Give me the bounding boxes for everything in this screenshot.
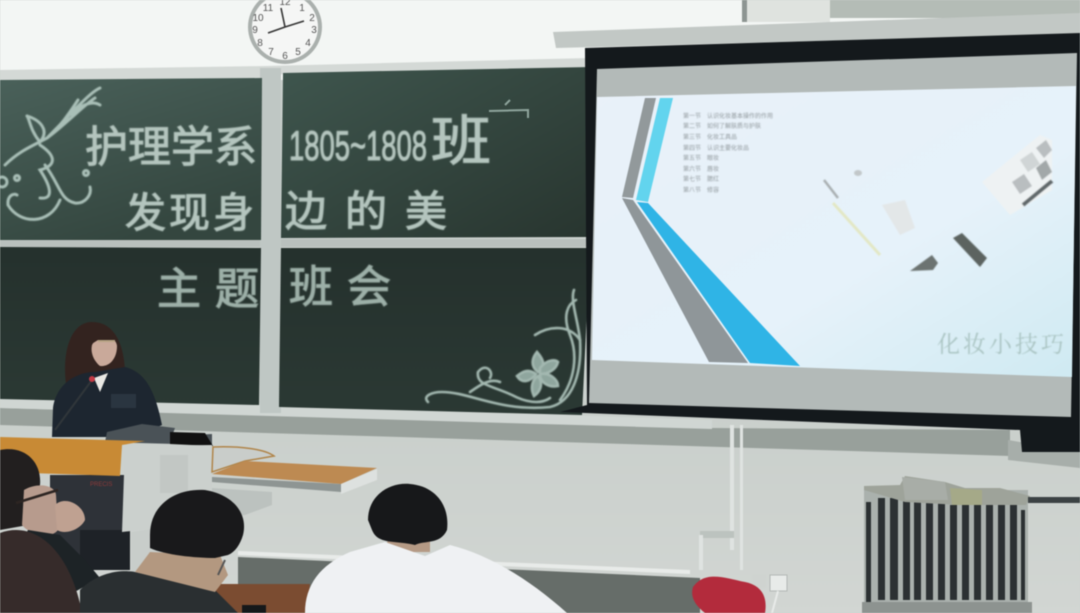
slide table of contents: 第五节 眼妆: [683, 154, 719, 162]
wall clock: [248, 0, 322, 64]
chalk heading: department: 护理学系: [85, 124, 257, 172]
wall clock: 6: [282, 51, 288, 62]
slide makeup illustration: [824, 135, 1052, 271]
wall clock: 7: [268, 47, 274, 58]
radiator: [862, 476, 1032, 613]
upper wall: [0, 0, 1080, 80]
chalk heading: beauty around: 边的美: [285, 188, 465, 235]
slide decoration: grey upper band: [622, 98, 656, 198]
podium: PRECIS: [90, 482, 112, 488]
projector screen surface: [589, 53, 1077, 417]
slide table of contents: 第一节 认识化妆基本操作的作用: [683, 112, 773, 120]
slide table of contents: [683, 112, 773, 194]
podium: [0, 437, 212, 572]
wall clock: 8: [257, 38, 263, 49]
chalk flourish bottom right: [426, 290, 580, 408]
projector screen frame: [560, 33, 1080, 452]
blackboard frame: [0, 58, 712, 429]
wall clock: 4: [305, 38, 311, 49]
chalk heading: class: 班: [431, 112, 491, 172]
blackboard panel: bottom left: [0, 247, 261, 405]
skirting board: [205, 551, 700, 613]
projector housing: [553, 13, 1080, 48]
student: right: [305, 484, 567, 613]
wall sockets: [752, 574, 787, 613]
slide table of contents: 第三节 化妆工具品: [683, 133, 737, 141]
lower wall: [0, 400, 1080, 613]
chalk heading: class numbers: 1805~1808: [289, 122, 427, 169]
slide: [592, 86, 1076, 377]
student: front left hair: [0, 530, 82, 613]
radiator pipe: [1028, 497, 1080, 503]
wall clock: 3: [311, 25, 317, 36]
slide decoration: blue lower band: [637, 202, 800, 366]
slide table of contents: 第七节 腮红: [683, 175, 719, 183]
slide decoration: grey lower band: [622, 198, 748, 363]
chalk heading: class meeting: 班会: [289, 263, 405, 312]
blackboard panel: top right: [281, 67, 592, 238]
red bag: [692, 577, 766, 613]
slide decoration: cyan upper band: [636, 98, 673, 202]
wall clock: 9: [252, 25, 258, 36]
podium equipment: [105, 424, 213, 446]
presenter: [52, 322, 162, 437]
chalk heading: theme: 主题: [157, 265, 273, 314]
chalk flourish top left: [0, 88, 100, 219]
student: left man: [0, 449, 100, 600]
wall clock: 11: [263, 3, 274, 14]
wall clock: 2: [309, 13, 315, 24]
small chalk mark: [489, 100, 528, 118]
slide title: 化妆小技巧: [937, 332, 1067, 357]
student: middle: [80, 490, 244, 613]
wall clock: 1: [299, 3, 305, 14]
drink can: [242, 605, 266, 613]
blackboard panel: bottom right: [279, 248, 590, 415]
microphone: [55, 376, 95, 430]
chalk heading: discover: 发现身: [125, 190, 257, 236]
wall clock: 5: [295, 47, 301, 58]
slide table of contents: 第八节 修容: [683, 186, 719, 194]
slide table of contents: 第四节 认识主要化妆品: [683, 144, 749, 152]
podium pull-out shelf: [212, 447, 377, 520]
blackboard panel: top left: [0, 78, 262, 240]
slide table of contents: 第六节 唇妆: [683, 165, 719, 173]
slide table of contents: 第二节 如何了解肤质与护肤: [683, 122, 761, 130]
wall clock: 10: [252, 13, 264, 24]
